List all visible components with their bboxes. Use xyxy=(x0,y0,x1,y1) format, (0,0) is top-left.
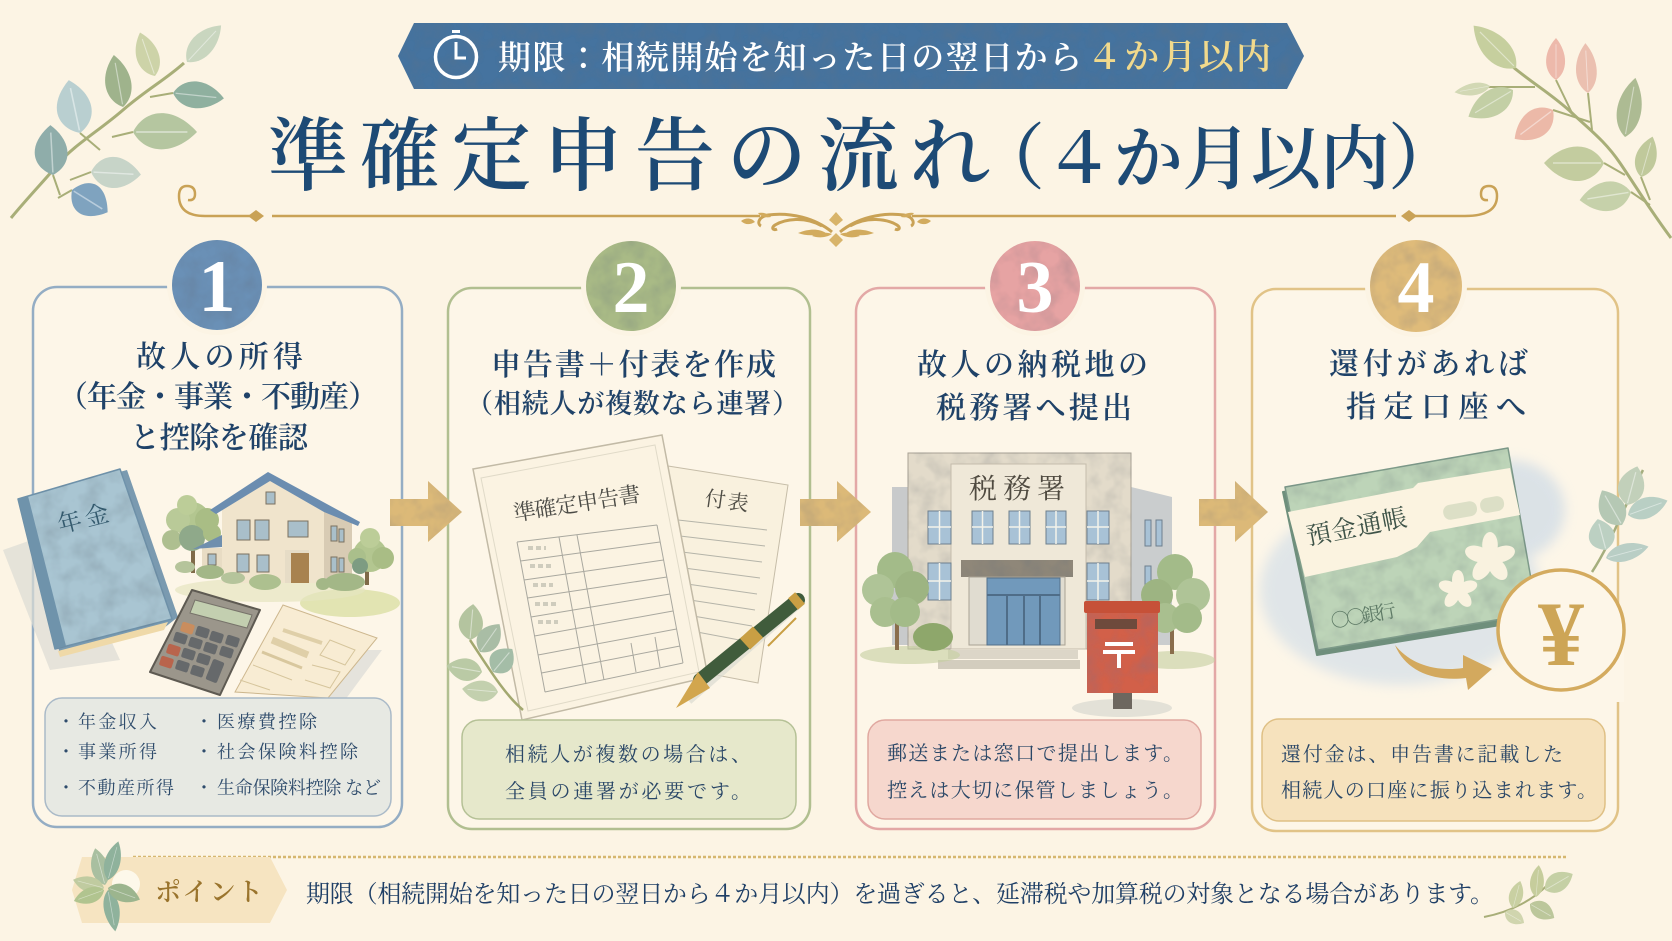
deadline banner xyxy=(398,23,1304,89)
title: 準確定申告の流れ xyxy=(268,114,990,202)
panel 1 heading: （年金・事業・不動産） xyxy=(58,381,378,414)
small leaf sprig: bottom right xyxy=(1484,864,1577,929)
deduction items: ・ xyxy=(195,712,213,732)
arrow 2 to 3 xyxy=(800,481,871,542)
step number 2 xyxy=(581,236,681,336)
left tree xyxy=(862,552,929,650)
icon: yen coin xyxy=(1498,570,1624,690)
panel 1 heading: 故人の所得 xyxy=(136,341,303,374)
panel 2 note: 全員の連署が必要です。 xyxy=(505,780,751,803)
panel 1 frame xyxy=(33,287,402,827)
point message: 期限（相続開始を知った日の翌日から４か月以内）を過ぎると、延滞税や加算税の対象となる場合があります。 xyxy=(306,881,1494,908)
panel 4 heading xyxy=(1329,348,1528,424)
panel 4 note: 還付金は、申告書に記載した xyxy=(1281,743,1563,766)
title xyxy=(268,114,1460,202)
step number 1: 1 xyxy=(198,246,236,328)
illustration: attached form xyxy=(668,466,788,683)
banner highlight: ４か月以内 xyxy=(1087,38,1271,77)
illustration: fountain pen xyxy=(676,598,802,708)
arrow 3 to 4 xyxy=(1199,481,1268,542)
flowers xyxy=(1437,532,1517,610)
income items: ・ xyxy=(57,742,75,762)
illustration: red post box xyxy=(1072,601,1172,717)
title ornament xyxy=(179,186,1497,247)
income items: 年金収入 xyxy=(78,711,157,732)
illustration: leaves xyxy=(445,603,523,710)
house windows xyxy=(208,492,344,572)
panel 1 heading: と控除を確認 xyxy=(130,422,310,455)
illustration: attached form: 付表 xyxy=(703,486,750,516)
illustration: blue wash xyxy=(1260,460,1565,685)
deduction items xyxy=(195,712,381,798)
building sign: 税務署 xyxy=(969,473,1065,505)
icon: leaf cluster xyxy=(71,839,143,933)
banner text: 期限：相続開始を知った日の翌日から xyxy=(498,40,1082,77)
panel 1 xyxy=(3,235,402,827)
panel 3 note xyxy=(868,720,1201,819)
illustration: house xyxy=(162,472,400,617)
book label: 年金 xyxy=(55,500,112,539)
title: ） xyxy=(1388,119,1460,199)
illustration: passbook xyxy=(1283,448,1537,655)
deduction items: 医療費控除 xyxy=(217,712,318,732)
panel 2 heading: 申告書＋付表を作成 xyxy=(491,349,776,382)
step number 3: 3 xyxy=(1016,247,1054,329)
panel 3 note: 郵送または窓口で提出します。 xyxy=(887,742,1183,765)
step number 1 xyxy=(167,235,267,335)
point label: ポイント xyxy=(155,878,263,907)
panel 4 note xyxy=(1262,719,1605,821)
step number 2: 2 xyxy=(612,247,650,329)
leaf sprig: top left xyxy=(11,17,229,226)
right tree xyxy=(1141,554,1210,654)
panel 2 frame xyxy=(448,288,810,829)
income items: 不動産所得 xyxy=(78,778,174,798)
illustration: calculator xyxy=(150,590,260,695)
panel 3 heading xyxy=(917,349,1148,425)
step number 4 xyxy=(1365,235,1467,337)
arrow 1 to 2 xyxy=(390,481,462,542)
illustration: return form xyxy=(473,435,708,720)
dotted divider xyxy=(133,856,1567,858)
bank name: ○○銀行 xyxy=(1328,596,1398,634)
left tree xyxy=(162,495,221,573)
leaf sprig: top right xyxy=(1454,17,1671,238)
illustration: tax office xyxy=(860,453,1215,669)
step number 4: 4 xyxy=(1398,247,1434,329)
step number 3 xyxy=(985,236,1085,336)
panel 4 frame xyxy=(1252,289,1618,831)
panel 3 xyxy=(856,236,1215,829)
panel 3 frame xyxy=(856,288,1215,829)
illustration: tax form xyxy=(235,605,382,700)
income items: ・ xyxy=(57,712,75,732)
deduction items: 生命保険料控除 など xyxy=(217,778,381,798)
panel 4 note: 相続人の口座に振り込まれます。 xyxy=(1281,779,1597,802)
panel 2 xyxy=(445,236,810,829)
illustration: pension book xyxy=(3,469,178,670)
panel 3 heading: 故人の納税地の xyxy=(917,349,1148,382)
small leaf sprig xyxy=(1585,463,1671,572)
form title: 準確定申告書 xyxy=(512,481,642,526)
panel 2 heading xyxy=(466,349,799,419)
panel 3 note: 控えは大切に保管しましょう。 xyxy=(887,779,1183,802)
income items xyxy=(57,711,174,798)
passbook label: 預金通帳 xyxy=(1304,504,1409,551)
deduction items: ・ xyxy=(195,742,213,762)
right tree xyxy=(348,528,394,585)
title: （ xyxy=(973,119,1045,199)
panel 2 heading: （相続人が複数なら連署） xyxy=(466,389,799,419)
deduction items: 社会保険料控除 xyxy=(217,742,359,762)
panel 2 note: 相続人が複数の場合は、 xyxy=(505,743,751,766)
curved arrow xyxy=(1395,645,1492,690)
income items: ・ xyxy=(57,778,75,798)
centre flourish xyxy=(741,212,931,247)
panel 1 list box xyxy=(45,698,391,816)
panel 1 heading xyxy=(58,341,378,455)
panel 4 heading: 指定口座へ xyxy=(1346,391,1526,424)
income items: 事業所得 xyxy=(78,742,157,762)
panel 2 note xyxy=(462,720,796,819)
point tag xyxy=(71,839,287,933)
icon: clock xyxy=(436,32,476,78)
panel 4 heading: 還付があれば xyxy=(1329,348,1528,381)
deduction items: ・ xyxy=(195,778,213,798)
panel 3 heading: 税務署へ提出 xyxy=(936,392,1132,425)
icon: yen coin: ¥ xyxy=(1538,583,1584,685)
panel 4 xyxy=(1252,235,1671,831)
title: ４か月以内 xyxy=(1044,122,1390,199)
